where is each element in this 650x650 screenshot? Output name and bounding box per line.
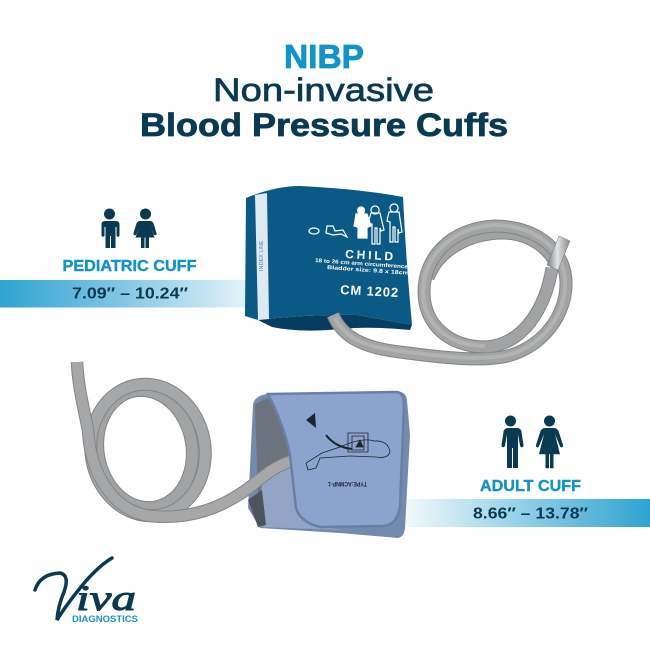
logo: Viva Diagnostics: DIAGNOSTICS xyxy=(72,614,138,625)
title: Blood Pressure Cuffs xyxy=(140,107,508,143)
index line strip xyxy=(255,193,269,320)
tube: adult xyxy=(77,362,292,525)
connector: metal tube end xyxy=(547,236,570,270)
cuff printed text: 18 to 26 cm arm circumference xyxy=(315,258,408,270)
logo: Viva Diagnostics: iva xyxy=(76,578,136,618)
title: Non-invasive xyxy=(213,72,434,108)
icon: man xyxy=(501,416,524,468)
cuff arm diagram xyxy=(306,433,390,470)
icon: woman xyxy=(536,416,563,468)
cuff arrow marker xyxy=(306,413,316,428)
adult cuff label: ADULT CUFF xyxy=(480,478,581,495)
adult cuff back xyxy=(248,391,410,538)
cuff type text: TYPE:ACMNP-1 xyxy=(327,480,367,486)
logo: Viva Diagnostics xyxy=(35,558,138,625)
pediatric cuff label: PEDIATRIC CUFF xyxy=(62,258,197,275)
pediatric size bar xyxy=(0,280,250,308)
cuff printed text: Bladder size: 9.8 x 18cm xyxy=(327,265,409,277)
icon: boy xyxy=(102,208,120,248)
title: NIBP xyxy=(284,38,364,75)
pediatric size range: 7.09″ – 10.24″ xyxy=(72,286,189,302)
adult size bar xyxy=(405,499,650,527)
cuff printed text: CHILD xyxy=(345,247,394,264)
cuff pictograms xyxy=(309,204,402,244)
icon: girl xyxy=(133,208,157,248)
tube: pediatric xyxy=(333,225,566,359)
adult size range: 8.66″ – 13.78″ xyxy=(473,506,589,522)
cuff printed text xyxy=(315,247,409,300)
index line strip: INDEX LINE xyxy=(259,240,265,271)
cuff printed text: CM 1202 xyxy=(340,282,399,300)
title xyxy=(140,38,508,143)
adult cuff flap xyxy=(268,392,404,527)
pediatric cuff xyxy=(245,186,412,331)
